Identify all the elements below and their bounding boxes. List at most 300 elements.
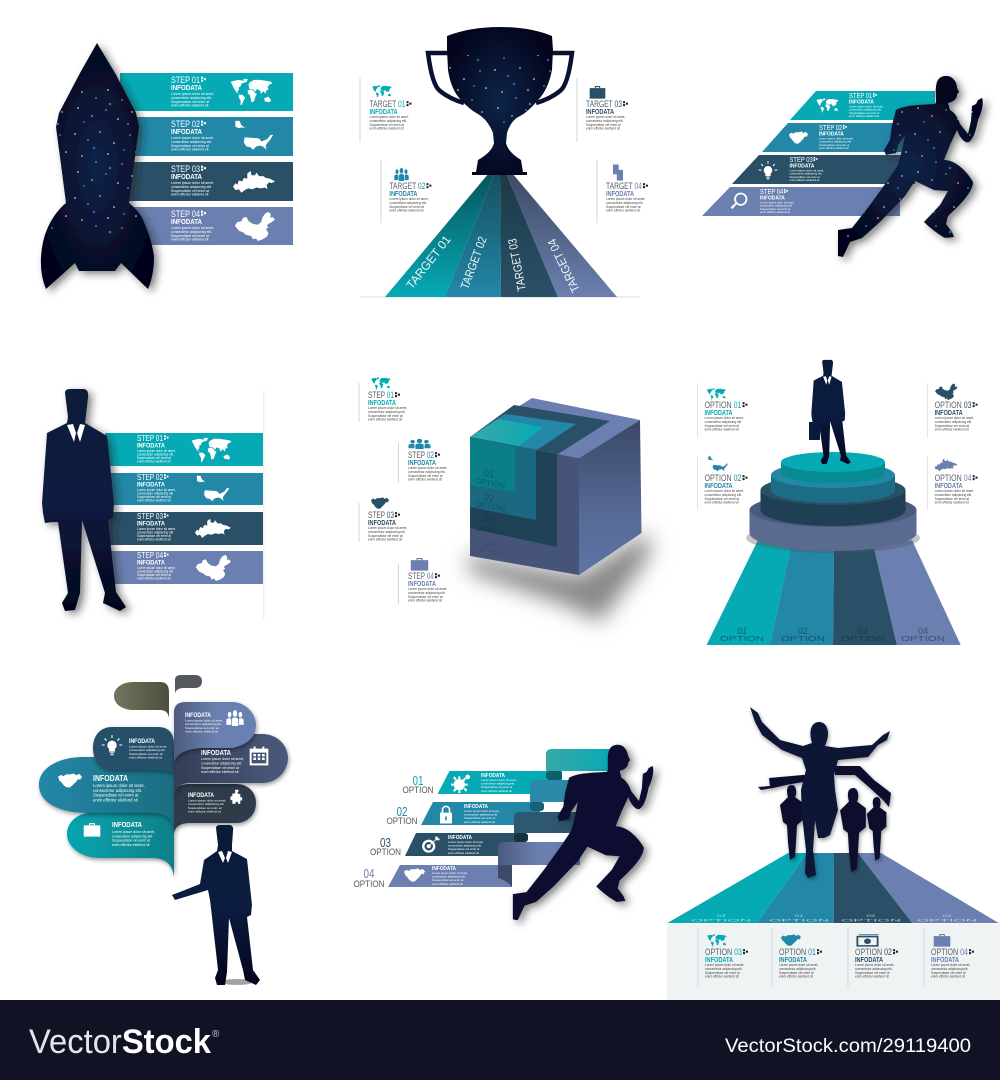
text: step 01: consectetur adipiscing elit. [171,96,212,100]
text: step 03: INFODATA [171,174,202,181]
text: band 02: INFODATA [464,804,488,810]
text: periwinkle bubble: enim efficitur eleifend sit [185,730,218,734]
text: step 02: Suspendisse vel enim at [137,495,171,499]
text: band 01: consectetur adipiscing elit. [481,782,515,786]
option labels: OPTION [354,879,385,890]
icon: usa map [197,476,229,501]
label: target 02: Lorem ipsum dolor sit amet, [389,197,429,201]
text: charcoal bubble: INFODATA [188,793,215,799]
text: step 02: consectetur adipiscing elit. [819,140,852,144]
perspective road [706,540,961,645]
label: target 04: INFODATA [606,191,634,198]
text: step 02: Lorem ipsum dolor sit amet, [137,488,176,492]
label: option 02: enim efficitur eleifend sit [704,501,739,505]
trophy silhouette with stars [428,27,572,175]
text: dark teal bubble: consectetur adipiscing elit. [129,748,165,752]
text: step 03 [790,155,824,182]
icon: briefcase [84,823,100,837]
text: step 03: STEP 03 [171,164,200,174]
cube face labels: OPTION [475,523,505,538]
cube face labels [475,468,505,560]
label: target 01: TARGET 01 [370,99,406,109]
label: option 01: Suspendisse vel enim at [779,971,814,975]
road labels: TARGET 01 [403,233,454,292]
label: option 03: Suspendisse vel enim at [935,424,969,428]
label: step 01: Suspendisse vel enim at [368,414,403,418]
label: step 04: consectetur adipiscing elit. [408,591,445,595]
panel: podium options [698,360,978,645]
text: blue bubble: Lorem ipsum dolor sit amet, [93,783,145,788]
text: charcoal bubble [188,793,226,814]
option labels [354,773,434,890]
panel: trophy targets [360,27,648,298]
text: step 02: STEP 02 [137,473,163,482]
road labels [691,914,977,923]
text: step 02: enim efficitur eleifend sit [819,146,849,150]
text: step 04: consectetur adipiscing elit. [171,230,212,234]
small grey bubble [175,675,202,693]
text: step 01: enim efficitur eleifend sit [137,459,171,463]
label: option 03: OPTION 03 [705,947,742,957]
label: step 01: STEP 01 [368,390,394,400]
label: option 04: Lorem ipsum dolor sit amet, [931,963,970,967]
text: band 03: enim efficitur eleifend sit [448,851,479,855]
text: band 01 [481,773,517,793]
text: teal bubble: consectetur adipiscing elit. [112,834,153,838]
icon: lightbulb [759,161,777,179]
label: option 01: consectetur adipiscing elit. [779,967,816,971]
option labels: OPTION [386,816,418,827]
label: target 01 [360,78,411,142]
road labels: 01 [737,626,747,636]
text: step 01 [171,75,214,108]
label: step 03: consectetur adipiscing elit. [368,530,405,534]
label: target 03: consectetur adipiscing elit. [586,119,623,123]
text: blue bubble: enim efficitur eleifend sit [93,797,139,802]
text: step 02 [819,123,854,150]
icon: lightbulb [102,735,122,755]
base shadow line [360,296,640,298]
text: band 03: Lorem ipsum dolor sit amet, [448,840,484,844]
label: step 01: consectetur adipiscing elit. [368,410,405,414]
label: option 01: OPTION 01 [779,947,816,957]
label: option 03 [698,928,748,987]
text: step 01 [137,434,176,463]
label: option 02: OPTION 02 [704,473,742,483]
road labels: 02 [798,626,808,636]
label: target 02: TARGET 02 [389,181,425,191]
panel: businessman steps [42,389,264,620]
label: option 02: consectetur adipiscing elit. [704,493,742,497]
icon: people [226,710,244,726]
text: blue bubble: consectetur adipiscing elit. [93,788,142,793]
text: step 02: consectetur adipiscing elit. [137,491,174,495]
text: step 02: INFODATA [137,481,165,488]
text: step 01: consectetur adipiscing elit. [849,108,882,112]
text: band 02 [464,804,500,824]
label: option 02: Lorem ipsum dolor sit amet, [855,963,894,967]
perspective road [667,853,999,923]
text: step 04: enim efficitur eleifend sit [171,238,209,242]
label: target 04: consectetur adipiscing elit. [606,201,643,205]
road labels [720,626,945,643]
text: step 01: Suspendisse vel enim at [171,100,209,104]
label: target 03: INFODATA [586,109,614,116]
text: step 01: consectetur adipiscing elit. [137,452,174,456]
text: blue bubble [93,774,145,802]
perspective road [385,173,617,297]
cube face labels: 01 [483,468,495,481]
teal bubble [67,813,174,877]
label: option 02: Lorem ipsum dolor sit amet, [704,489,744,493]
label: option 04: OPTION 04 [935,473,972,483]
label: step 01 [359,377,407,422]
road labels: 01 [795,914,804,918]
text: step 02: enim efficitur eleifend sit [171,148,209,152]
text: band 01: Lorem ipsum dolor sit amet, [481,778,517,782]
label: option 04: Lorem ipsum dolor sit amet, [935,489,974,493]
road labels: 04 [918,626,928,636]
icon: target [422,837,440,853]
label: target 01: Suspendisse vel enim at [370,123,404,127]
text: charcoal bubble: enim efficitur eleifend sit [188,810,221,814]
icon: world map [816,98,839,112]
text: step 02: Suspendisse vel enim at [171,144,209,148]
label: option 03: enim efficitur eleifend sit [705,975,739,979]
label: option 02: OPTION 02 [855,947,892,957]
text: step 01: STEP 01 [137,434,163,443]
label: option 04: consectetur adipiscing elit. [931,967,968,971]
text: step 03: Suspendisse vel enim at [171,189,209,193]
olive bubble [114,682,169,718]
road labels: OPTION [720,634,764,643]
icon: handshake [58,773,82,788]
runners silhouettes [750,707,891,878]
grey info strip [667,924,1000,1000]
label: option 01 [698,383,747,438]
text: periwinkle bubble: consectetur adipiscing elit. [185,722,221,726]
text: step 01: enim efficitur eleifend sit [171,104,209,108]
text: band 02: Suspendisse vel enim at [464,816,496,820]
text: dark teal bubble: Lorem ipsum dolor sit amet, [129,744,167,748]
label: target 04: Suspendisse vel enim at [606,205,641,209]
text: teal bubble: Lorem ipsum dolor sit amet, [112,830,155,834]
label: option 02 [848,928,898,987]
text: step 01: Lorem ipsum dolor sit amet, [171,92,214,96]
text: step 04: STEP 04 [760,187,783,196]
ribbon band 04 [388,842,580,887]
icon: gear [451,775,470,793]
option labels: 03 [380,835,391,850]
label: option 04: consectetur adipiscing elit. [935,493,972,497]
text: step 01: STEP 01 [171,75,200,85]
label: option 02: enim efficitur eleifend sit [855,975,889,979]
label: option 04: OPTION 04 [931,947,968,957]
label: target 03: enim efficitur eleifend sit [586,127,620,131]
text: slate bubble [201,750,244,774]
label: option 01: Lorem ipsum dolor sit amet, [704,416,744,420]
text: step 03: INFODATA [790,164,814,170]
stepped podium [746,452,920,553]
cube face labels: 04 [483,538,495,551]
text: step 03 [137,512,176,541]
text: step 01: INFODATA [171,85,202,92]
label: step 03 [359,497,407,542]
text: step 04: consectetur adipiscing elit. [760,204,793,208]
label: option 03: INFODATA [705,957,733,964]
label: target 01: enim efficitur eleifend sit [370,127,404,131]
label: target 03: Lorem ipsum dolor sit amet, [586,115,625,119]
label: target 02 [381,160,431,223]
step bars [105,433,263,584]
label: option 03: OPTION 03 [935,400,972,410]
panel: finish line options [667,707,1000,1000]
rocket silhouette with stars [41,43,154,289]
road labels: 04 [943,914,952,918]
text: band 02: Lorem ipsum dolor sit amet, [464,809,500,813]
text: step 03: Lorem ipsum dolor sit amet, [171,181,214,185]
text: step 01: Lorem ipsum dolor sit amet, [137,449,176,453]
dark teal bubble [93,727,174,775]
text: step 03: consectetur adipiscing elit. [171,185,212,189]
text: charcoal bubble: consectetur adipiscing elit. [188,802,224,806]
label: option 01: INFODATA [779,957,807,964]
text: teal bubble [112,822,155,847]
road labels: 03 [858,626,868,636]
label: option 03 [928,383,978,438]
label: target 02: Suspendisse vel enim at [389,205,424,209]
icon: world map [192,438,231,462]
text: step 03: consectetur adipiscing elit. [137,530,174,534]
label: option 03: consectetur adipiscing elit. [935,420,972,424]
label: option 04: INFODATA [935,483,963,490]
label: step 02: STEP 02 [408,450,434,460]
label: target 03: TARGET 03 [586,99,622,109]
text: teal bubble: Suspendisse vel enim at [112,839,150,843]
text: band 04: enim efficitur eleifend sit [432,882,463,886]
text: step 04: Suspendisse vel enim at [760,207,791,211]
panel: sprinter steps [702,76,983,257]
text: step 04: INFODATA [171,219,202,226]
panel: speech bubble tree [39,675,288,985]
label: target 02: enim efficitur eleifend sit [389,209,424,213]
label: step 04: STEP 04 [408,571,434,581]
slanted bars [702,91,935,216]
cube face labels: 03 [483,514,495,527]
option labels: OPTION [370,847,401,858]
text: step 02 [137,473,176,502]
label: step 03: enim efficitur eleifend sit [368,538,402,542]
road labels: OPTION [901,634,945,643]
label: target 03 [577,78,628,142]
periwinkle bubble [174,702,256,762]
cube face labels: OPTION [475,476,505,491]
road labels: 03 [717,914,726,918]
registered mark: ® [212,1029,220,1040]
side shadow [263,390,264,620]
text: step 04: enim efficitur eleifend sit [137,576,171,580]
icon: russia map [233,171,275,193]
text: step 04: consectetur adipiscing elit. [137,569,174,573]
road labels [403,233,583,295]
label: step 03: STEP 03 [368,510,394,520]
text: step 01: STEP 01 [849,91,872,100]
text: step 03: INFODATA [137,520,165,527]
label: option 02: Suspendisse vel enim at [855,971,890,975]
label: target 04 [597,160,648,223]
label: step 04: Suspendisse vel enim at [408,595,443,599]
text: band 04: INFODATA [432,866,456,872]
cube face labels: 02 [483,492,495,505]
label: step 01: enim efficitur eleifend sit [368,418,402,422]
text: band 04: Suspendisse vel enim at [432,878,464,882]
cube shadow [466,532,650,622]
label: option 03: Lorem ipsum dolor sit amet, [935,416,974,420]
text: step 04: Suspendisse vel enim at [137,573,171,577]
charcoal bubble [174,784,256,833]
ribbon band 02 [421,780,600,825]
road labels: TARGET 02 [458,234,490,291]
text: step 03: Lorem ipsum dolor sit amet, [790,169,824,173]
text: step 03 [171,164,214,197]
text: band 01: enim efficitur eleifend sit [481,789,512,793]
cube [470,398,642,575]
label: target 01: Lorem ipsum dolor sit amet, [370,115,409,119]
label: option 03: Suspendisse vel enim at [705,971,740,975]
text: step 01: INFODATA [137,442,165,449]
label: option 02 [698,456,747,510]
footer bar [0,1000,1000,1080]
footer logo: VectorStock [29,1023,211,1061]
text: slate bubble: consectetur adipiscing elit. [201,761,242,765]
text: teal bubble: INFODATA [112,822,142,829]
label: option 01: INFODATA [704,410,732,417]
text: charcoal bubble: Suspendisse vel enim at [188,806,222,810]
label: step 02: Lorem ipsum dolor sit amet, [408,466,447,470]
road labels: OPTION [841,634,885,643]
text: slate bubble: INFODATA [201,750,231,757]
text: step 02: enim efficitur eleifend sit [137,498,171,502]
text: periwinkle bubble: Lorem ipsum dolor sit amet, [185,718,223,722]
icon: calendar [250,747,268,765]
icon: magnifier [731,193,747,209]
label: step 03: Suspendisse vel enim at [368,534,403,538]
cube face labels: OPTION [475,545,505,560]
text: dark teal bubble: INFODATA [129,739,156,745]
panel: cube options [359,377,650,622]
label: option 04: Suspendisse vel enim at [935,497,969,501]
label: target 01: INFODATA [370,109,397,116]
businessman silhouette [42,389,126,611]
text: step 04: STEP 04 [137,551,163,560]
text: band 03: INFODATA [448,835,472,841]
label: option 04 [924,928,974,987]
label: option 02: consectetur adipiscing elit. [855,967,892,971]
label: option 03: consectetur adipiscing elit. [705,967,742,971]
icon: handshake [789,131,808,144]
option labels: OPTION [402,785,434,796]
icon: china map [196,555,231,581]
label: option 04 [928,457,978,510]
text: step 04: enim efficitur eleifend sit [760,210,790,214]
icon: world map [231,79,272,105]
label: step 02: enim efficitur eleifend sit [408,478,442,482]
label: option 02: Suspendisse vel enim at [704,497,739,501]
text: step 02: Lorem ipsum dolor sit amet, [819,137,854,141]
label: step 04: INFODATA [408,581,436,588]
label: option 02: INFODATA [855,957,883,964]
text: step 01 [849,91,884,118]
label: option 04: enim efficitur eleifend sit [931,975,965,979]
text: step 04: INFODATA [137,559,165,566]
text: step 02: Lorem ipsum dolor sit amet, [171,136,214,140]
text: step 01: enim efficitur eleifend sit [849,114,879,118]
icon: china map [235,212,275,241]
text: blue bubble: INFODATA [93,774,128,783]
label: step 04 [398,558,447,604]
label: option 01: Suspendisse vel enim at [704,424,739,428]
label: option 01: OPTION 01 [704,400,742,410]
road labels: TARGET 04 [545,236,583,295]
label: option 01: Lorem ipsum dolor sit amet, [779,963,818,967]
text: step 04: Suspendisse vel enim at [171,234,209,238]
text: step 03: enim efficitur eleifend sit [790,178,820,182]
label: step 01: Lorem ipsum dolor sit amet, [368,406,407,410]
text: step 04: Lorem ipsum dolor sit amet, [760,201,795,205]
text: step 03: enim efficitur eleifend sit [171,193,209,197]
text: step 01: Lorem ipsum dolor sit amet, [849,105,884,109]
label: option 04: INFODATA [931,957,959,964]
text: step 04: STEP 04 [171,209,200,219]
text: step 03: consectetur adipiscing elit. [790,172,823,176]
text: periwinkle bubble: Suspendisse vel enim at [185,726,219,730]
text: step 02: consectetur adipiscing elit. [171,140,212,144]
label: target 04: TARGET 04 [606,181,642,191]
text: slate bubble: Suspendisse vel enim at [201,766,239,770]
label: step 02: Suspendisse vel enim at [408,474,443,478]
text: blue bubble: Suspendisse vel enim at [93,793,139,798]
road labels: OPTION [781,634,825,643]
text: step 04: Lorem ipsum dolor sit amet, [171,226,214,230]
option labels: 04 [364,866,374,881]
label: target 04: enim efficitur eleifend sit [606,209,640,213]
label: option 03: Lorem ipsum dolor sit amet, [705,963,744,967]
text: teal bubble: enim efficitur eleifend sit [112,843,150,847]
label: option 03: enim efficitur eleifend sit [935,428,969,432]
text: band 04: Lorem ipsum dolor sit amet, [432,871,468,875]
text: dark teal bubble: Suspendisse vel enim at [129,752,163,756]
runner silhouette [513,745,653,920]
icon: usa map [235,121,273,150]
text: charcoal bubble: Lorem ipsum dolor sit amet, [188,798,226,802]
label: target 03: Suspendisse vel enim at [586,123,621,127]
runner silhouette with stars [838,76,983,257]
label: step 04: Lorem ipsum dolor sit amet, [408,587,447,591]
text: step 01: INFODATA [849,100,874,106]
label: option 01: consectetur adipiscing elit. [704,420,742,424]
panel: rocket steps [41,43,293,289]
label: option 04: Suspendisse vel enim at [931,971,966,975]
option labels: 01 [412,773,424,788]
label: target 02: consectetur adipiscing elit. [389,201,427,205]
text: dark teal bubble [129,739,167,760]
icon: puzzle piece [230,790,242,804]
label: option 01 [772,928,822,987]
label: step 03: INFODATA [368,520,396,527]
text: step 04 [760,187,795,214]
road labels: OPTION [917,919,977,923]
text: step 03: Suspendisse vel enim at [137,534,171,538]
